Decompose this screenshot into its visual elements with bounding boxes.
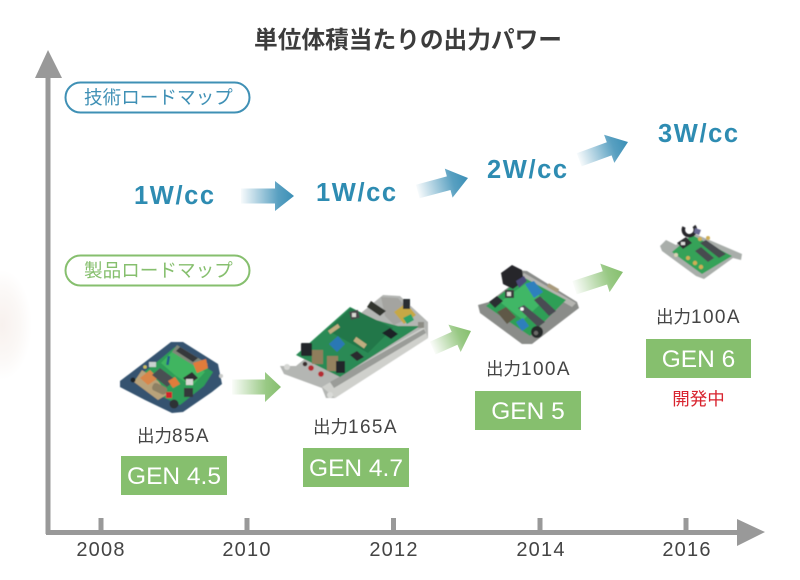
badge GEN 4.5: GEN 4.5: [127, 463, 221, 490]
year labels: 2014: [516, 539, 566, 561]
output label 100A (GEN 5): 出力100A: [486, 356, 571, 381]
badge GEN 5: [475, 391, 581, 430]
in-development note: 開発中: [672, 386, 725, 411]
product image: GEN 4.7 board: [280, 295, 428, 398]
power density values: 3W/cc: [658, 120, 740, 148]
year labels: 2010: [222, 539, 272, 561]
badge GEN 4.7: GEN 4.7: [309, 455, 403, 482]
output label 100A (GEN 6): 出力100A: [656, 304, 741, 329]
year labels: 2008: [76, 539, 126, 561]
product roadmap pill: 製品ロードマップ: [84, 256, 233, 283]
product image: GEN 4.5 board: [120, 342, 223, 413]
green arrow 1: [232, 372, 281, 402]
power density values: [134, 120, 740, 210]
green arrow 3: [570, 258, 628, 302]
title: 単位体積当たりの出力パワー: [254, 21, 562, 55]
blue arrow 3: [574, 128, 633, 174]
product image: GEN 6 board: [660, 226, 742, 279]
horizontal time axis: [46, 518, 765, 546]
product image: GEN 5 board: [478, 265, 579, 344]
year labels: 2016: [662, 539, 712, 561]
year labels: [76, 539, 712, 561]
blue arrow 1: [241, 181, 294, 211]
vertical axis arrow: [35, 50, 62, 534]
output label 85A: 出力85A: [137, 423, 210, 448]
blue arrow 2: [414, 164, 472, 206]
technology roadmap pill: 技術ロードマップ: [84, 83, 233, 110]
output label 165A: 出力165A: [313, 414, 398, 439]
badge GEN 6: GEN 6: [662, 346, 735, 373]
power density values: 1W/cc: [134, 182, 216, 210]
green arrow 2: [427, 317, 477, 362]
badge GEN 5: GEN 5: [491, 398, 565, 425]
badge GEN 4.5: [121, 456, 227, 495]
power density values: 2W/cc: [487, 156, 569, 184]
badge GEN 4.7: [303, 448, 409, 487]
power density values: 1W/cc: [316, 179, 398, 207]
year labels: 2012: [369, 539, 419, 561]
badge GEN 6: [646, 339, 751, 378]
